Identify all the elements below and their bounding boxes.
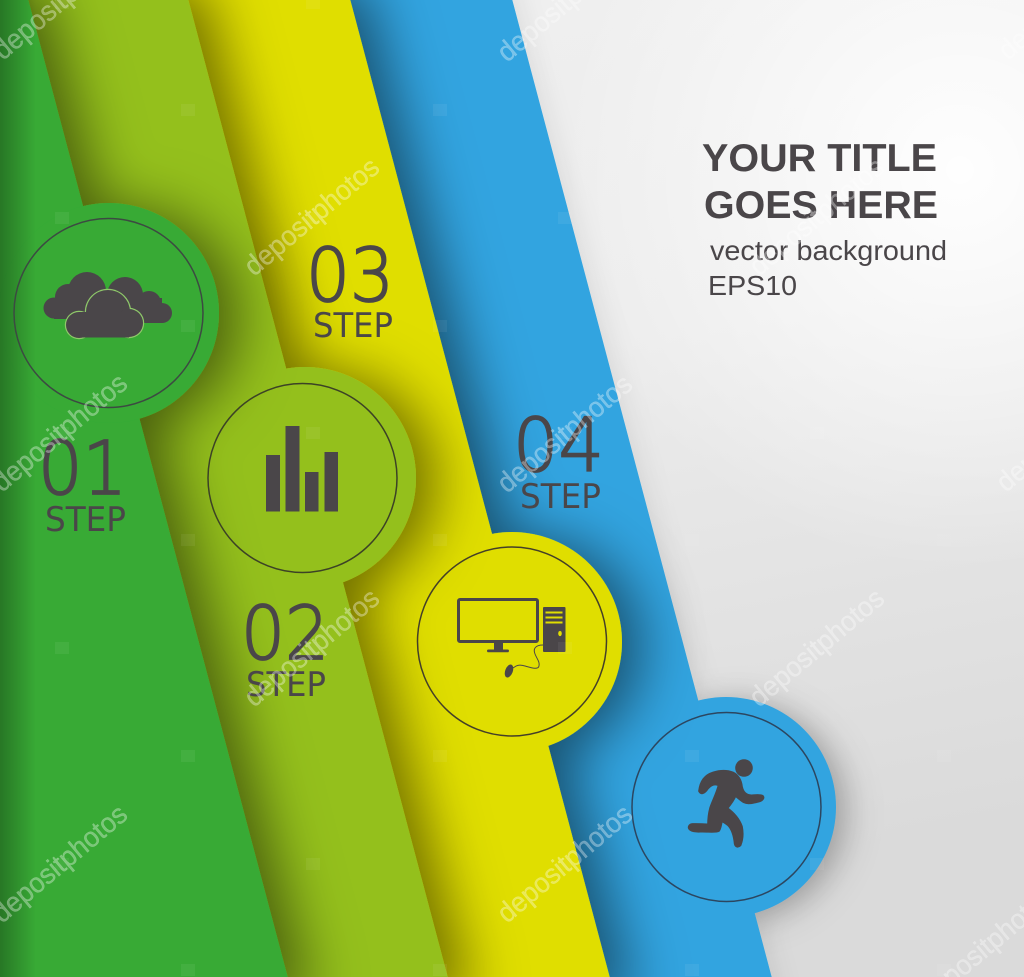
step 4 circle shadow <box>630 704 846 920</box>
step 3 label: STEP <box>313 306 393 346</box>
step 4 label: 04 <box>513 403 604 489</box>
icon: desktop computer <box>458 600 566 679</box>
icon: bar chart <box>266 426 338 512</box>
band: lime with step 2 circle <box>0 0 453 977</box>
icon: clouds <box>44 272 172 339</box>
icon: running person <box>689 759 763 846</box>
ring: step 1 <box>14 218 203 408</box>
title: YOUR TITLE <box>702 137 937 180</box>
step 4 label: STEP <box>520 477 601 517</box>
watermarks: depositphotos <box>743 582 890 713</box>
band: green with step 1 circle <box>0 0 293 977</box>
subtitle: vector background <box>710 235 947 266</box>
subtitle: EPS10 <box>708 270 797 301</box>
subtitle <box>708 235 947 301</box>
title: GOES HERE <box>704 184 938 227</box>
watermarks: depositphotos <box>238 151 385 282</box>
left edge shading <box>0 0 36 977</box>
ring: step 4 <box>632 712 821 902</box>
step 3 label: 03 <box>306 233 394 319</box>
title <box>702 137 938 227</box>
step 1 label: STEP <box>45 500 126 540</box>
watermarks: depositphotos <box>238 582 385 713</box>
watermarks: depositphotos <box>491 368 638 499</box>
band: yellow with step 3 circle <box>0 0 622 977</box>
watermarks: depositphotos <box>743 151 890 282</box>
ring: step 2 <box>208 384 397 572</box>
step 2 label: STEP <box>246 665 326 705</box>
ring: step 3 <box>418 547 606 736</box>
step 2 label: 02 <box>241 591 329 677</box>
step 1 label: 01 <box>38 426 127 512</box>
watermarks: depositphotos <box>491 798 638 929</box>
